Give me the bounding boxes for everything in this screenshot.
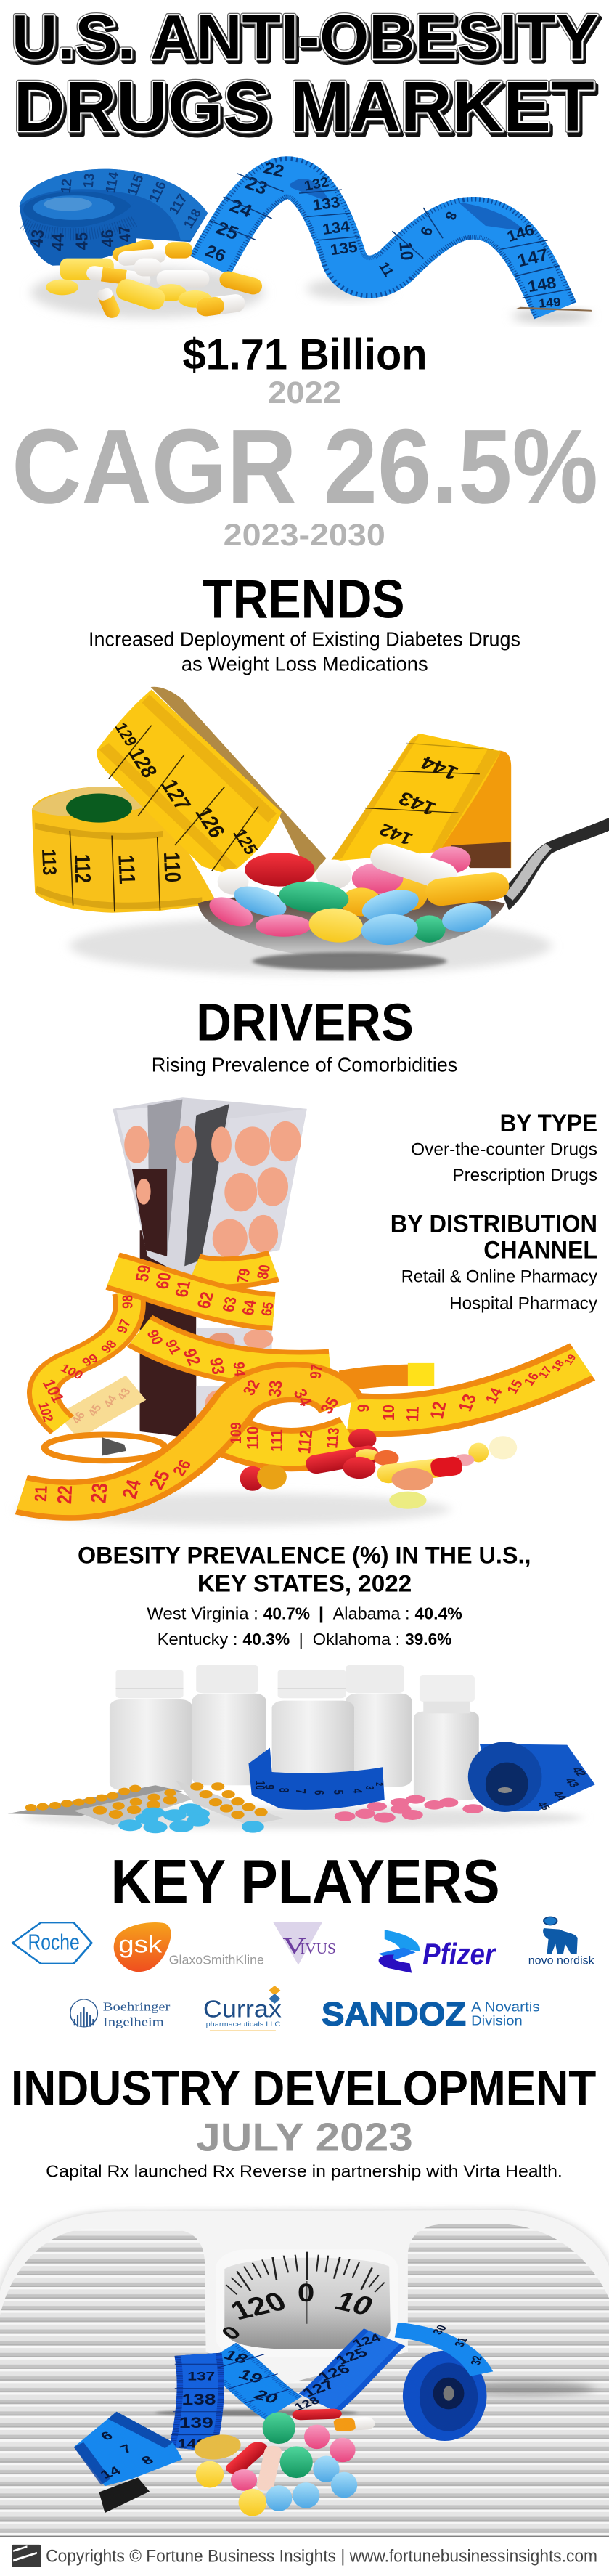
- logo: Sandoz: Division: [471, 2014, 523, 2028]
- image: blue measuring tape with yellow pills: 134: [321, 217, 351, 238]
- image: blister packs wrapped in orange tape: 97: [307, 1364, 326, 1379]
- image: blister packs wrapped in orange tape: 102: [35, 1401, 57, 1423]
- dial: 0: [216, 2323, 246, 2344]
- prevalence values: 40.7%: [263, 1605, 310, 1623]
- tape ribbons: [192, 2330, 482, 2450]
- yellow tape roll: [32, 787, 218, 913]
- image: blister packs wrapped in orange tape: 61: [171, 1279, 195, 1299]
- image: blue measuring tape with yellow pills: 149: [538, 295, 561, 311]
- tape roll: 118: [181, 206, 204, 231]
- image: blue measuring tape with yellow pills: 24: [227, 196, 256, 222]
- image: bathroom scale with tape and pills: 137: [187, 2370, 215, 2384]
- tape roll: 12: [57, 178, 75, 194]
- image: blister packs wrapped in orange tape: 91: [161, 1338, 184, 1357]
- logo: Roche: [12, 1922, 91, 1964]
- image: bathroom scale with tape and pills: 125: [332, 2345, 371, 2368]
- image: blister packs wrapped in orange tape: 17: [536, 1365, 555, 1381]
- yellow tape loop: [97, 687, 326, 878]
- scale plate: [0, 2210, 609, 2536]
- image: blister packs wrapped in orange tape: 99: [79, 1351, 101, 1369]
- image: blue measuring tape with yellow pills: 147: [515, 245, 550, 271]
- image: bathroom scale with tape and pills: 18: [220, 2347, 251, 2367]
- image: blister packs wrapped in orange tape: 79: [234, 1267, 254, 1284]
- image: blue measuring tape with yellow pills: 132: [303, 174, 330, 194]
- image: blister packs wrapped in orange tape: 14: [482, 1386, 506, 1406]
- ribbed surface: [0, 2224, 609, 2536]
- image: bathroom scale with tape and pills: 126: [314, 2362, 353, 2384]
- blue band: 9: [261, 1784, 276, 1789]
- yellow tape loop: 129: [111, 720, 142, 749]
- pills on scale: [188, 2408, 376, 2516]
- image: blister packs wrapped in orange tape: 44: [102, 1394, 120, 1410]
- image: blister packs wrapped in orange tape: 65: [258, 1301, 277, 1317]
- image: blister packs wrapped in orange tape: 109: [227, 1422, 245, 1444]
- image: blister packs wrapped in orange tape: 34: [290, 1386, 316, 1409]
- prevalence values: Kentucky :: [158, 1631, 237, 1649]
- by distribution channel items: [401, 1267, 597, 1313]
- image: blister packs wrapped in orange tape: 94: [229, 1362, 248, 1377]
- logo: GSK: [114, 1922, 264, 1972]
- image: blister packs wrapped in orange tape: 33: [264, 1380, 286, 1398]
- image: blister packs wrapped in orange tape: 24: [118, 1477, 146, 1500]
- prevalence values: |: [298, 1631, 303, 1649]
- logo: Currax: Currax: [203, 1996, 282, 2023]
- blue band: 8: [276, 1788, 291, 1792]
- drivers heading: DRIVERS: [196, 993, 414, 1052]
- logo: Vivus: IVUS: [300, 1940, 336, 1957]
- logo: Vivus: [273, 1922, 336, 1965]
- image: bathroom scale with tape and pills: 8: [139, 2453, 157, 2468]
- tape roll: 45: [72, 232, 91, 250]
- section: key players and development: [11, 1848, 596, 2181]
- forecast period: 2023-2030: [224, 519, 385, 553]
- image: blister packs wrapped in orange tape: 9: [353, 1404, 373, 1412]
- logo: Boehringer Ingelheim: Boehringer: [103, 1999, 171, 2014]
- logo: GSK: GlaxoSmithKline: [169, 1953, 264, 1967]
- market value: $1.71 Billion: [182, 330, 428, 379]
- blue band: 4: [349, 1789, 364, 1794]
- spoon: [198, 818, 609, 970]
- image: blue measuring tape with yellow pills: 135: [329, 237, 359, 259]
- orange tape: [21, 1266, 583, 1500]
- image: blister packs wrapped in orange tape: 11: [402, 1406, 422, 1422]
- prevalence values: [147, 1605, 462, 1649]
- prevalence heading: KEY STATES, 2022: [197, 1570, 412, 1597]
- section: trends and drivers: [32, 569, 609, 1076]
- trends text: Increased Deployment of Existing Diabetes Drugs: [89, 628, 520, 651]
- blue tape roll: 42: [568, 1766, 589, 1779]
- yellow tape roll: 113: [37, 849, 60, 876]
- trends text: as Weight Loss Medications: [181, 653, 428, 675]
- prevalence heading: [78, 1543, 531, 1597]
- blue band: 6: [311, 1790, 326, 1795]
- prevalence values: Alabama :: [333, 1605, 410, 1623]
- pills: [46, 237, 264, 320]
- image: blue measuring tape with yellow pills: 22: [261, 158, 286, 182]
- image: blister packs wrapped in orange tape: 97: [113, 1317, 134, 1335]
- title: [12, 2, 600, 150]
- image: blister packs wrapped in orange tape: 80: [254, 1264, 274, 1280]
- tape roll: [403, 2351, 486, 2441]
- right tape band: 142: [376, 820, 416, 848]
- logo: Roche: Roche: [28, 1930, 80, 1954]
- yellow tape loop: 127: [155, 776, 195, 814]
- dial: 10: [330, 2286, 379, 2321]
- prevalence values: Oklahoma :: [313, 1631, 400, 1649]
- image: bathroom scale with tape and pills: 32: [468, 2355, 486, 2366]
- image: blister packs wrapped in orange tape: 101: [38, 1377, 68, 1405]
- image: bathroom scale with tape and pills: 128: [291, 2394, 322, 2413]
- tape roll: 114: [102, 171, 122, 194]
- blue band: 7: [293, 1789, 308, 1794]
- bottles: [110, 1665, 479, 1800]
- tape roll: 115: [124, 173, 147, 198]
- trends heading: TRENDS: [203, 569, 405, 630]
- blue tape roll: 45: [535, 1800, 553, 1812]
- yellow tape loop: 125: [229, 826, 261, 858]
- drivers text: Rising Prevalence of Comorbidities: [152, 1054, 457, 1076]
- image: blister packs wrapped in orange tape: 18: [549, 1359, 567, 1373]
- tape ribbon: [210, 178, 555, 311]
- tape roll: [20, 169, 208, 266]
- small pills: [240, 1429, 517, 1509]
- image: bathroom scale with tape and pills: 124: [350, 2332, 384, 2350]
- image: blister packs wrapped in orange tape: 21: [30, 1485, 51, 1502]
- image: blister packs wrapped in orange tape: 26: [168, 1457, 195, 1479]
- pills on spoon: [203, 840, 511, 947]
- prevalence values: 39.6%: [405, 1631, 451, 1649]
- image: blister packs wrapped in orange tape: 22: [54, 1485, 77, 1504]
- footer: [0, 2536, 609, 2575]
- image: blister packs wrapped in orange tape: 98: [98, 1337, 120, 1356]
- trends text: [89, 628, 520, 675]
- image: blue measuring tape with yellow pills: 10: [395, 241, 417, 261]
- image: bathroom scale with tape and pills: 138: [181, 2392, 216, 2408]
- image: blister packs wrapped in orange tape: 59: [131, 1264, 155, 1283]
- logo: Boehringer Ingelheim: [70, 1999, 171, 2029]
- image: yellow tape and spoon of pills: [32, 687, 609, 975]
- image: blister packs wrapped in orange tape: 23: [86, 1482, 113, 1504]
- yellow tape roll: 110: [158, 852, 185, 883]
- blister strips: [8, 1781, 284, 1825]
- tape roll: 43: [26, 229, 47, 248]
- image: blister packs wrapped in orange tape: 93: [205, 1357, 229, 1376]
- image: blue measuring tape with yellow pills: 146: [504, 221, 536, 245]
- image: blister packs wrapped in orange tape: 111: [266, 1429, 287, 1452]
- image: blister packs wrapped in orange tape: 19: [562, 1352, 579, 1366]
- blue band: 3: [363, 1786, 376, 1789]
- image: bathroom scale with tape and pills: 139: [179, 2415, 213, 2431]
- dial: 120: [225, 2287, 292, 2325]
- blue band: [248, 1748, 385, 1810]
- image: blister packs wrapped in orange tape: 64: [239, 1299, 260, 1317]
- tape roll: 46: [97, 229, 118, 248]
- image: blister packs wrapped in orange tape: 10: [379, 1405, 398, 1421]
- logo: Currax: pharmaceuticals LLC: [206, 2020, 281, 2028]
- image: blister packs wrapped in orange tape: 112: [293, 1429, 316, 1455]
- image: blue measuring tape with yellow pills: 8: [441, 209, 459, 222]
- image: blister packs wrapped in orange tape: 92: [179, 1346, 205, 1368]
- image: blister packs wrapped in orange tape: 13: [455, 1392, 481, 1414]
- section: obesity prevalence: [8, 1543, 595, 1833]
- image: bathroom scale with tape and pills: 140: [178, 2437, 205, 2451]
- right tape band: [330, 734, 511, 868]
- blue band: 10: [252, 1781, 267, 1790]
- development date: JULY 2023: [196, 2116, 413, 2160]
- logo: Fortune Business Insights: [12, 2545, 41, 2567]
- section: scale image and footer: [0, 2210, 609, 2575]
- image: blister packs wrapped in orange tape: 45: [86, 1402, 105, 1418]
- image: blister packs wrapped in orange tape: 32: [240, 1378, 263, 1398]
- yellow tape roll: 111: [113, 855, 139, 885]
- image: blister packs wrapped in orange tape: 15: [504, 1378, 526, 1396]
- image: blue measuring tape with yellow pills: 133: [311, 193, 341, 214]
- image: bathroom scale with tape and pills: 6: [97, 2429, 116, 2443]
- logo: Sandoz: A Novartis: [471, 2000, 540, 2015]
- tape roll: 116: [145, 179, 169, 204]
- blue band: 5: [330, 1789, 346, 1795]
- blue tape roll: 44: [549, 1789, 570, 1803]
- right tape band: 143: [395, 787, 440, 819]
- image: blue measuring tape with yellow pills: 26: [203, 241, 229, 266]
- image: blister packs wrapped in orange tape: 98: [119, 1295, 136, 1309]
- dial: [216, 2249, 398, 2357]
- tape roll: 44: [47, 232, 68, 251]
- image: blue measuring tape with yellow pills: 148: [526, 273, 557, 296]
- logo: Novo Nordisk: [528, 1917, 594, 1967]
- image: blue measuring tape with yellow pills: 23: [242, 173, 270, 199]
- image: blister packs wrapped in orange tape: 113: [324, 1427, 343, 1449]
- yellow tape loop: 128: [123, 744, 163, 781]
- prevalence values: 40.4%: [414, 1605, 462, 1623]
- pink pills: [335, 1795, 483, 1823]
- yellow tape loop: 126: [189, 804, 229, 842]
- prevalence values: |: [319, 1605, 324, 1623]
- blue pills: [118, 1803, 264, 1833]
- image: blister packs wrapped in orange tape: 12: [427, 1400, 451, 1421]
- by distribution channel heading: [391, 1211, 597, 1264]
- image: bathroom scale with tape and pills: 7: [117, 2442, 136, 2456]
- image: blister packs wrapped in orange tape: 90: [143, 1328, 166, 1347]
- image: blister packs wrapped in orange tape: 100: [58, 1361, 86, 1382]
- section: header: [12, 2, 600, 553]
- image: bathroom scale with tape and pills: 14: [97, 2464, 125, 2482]
- image: bathroom scale with tape and pills: [0, 2210, 609, 2536]
- image: blister packs wrapped in orange tape: [15, 1097, 583, 1525]
- logo: Currax: [203, 1986, 282, 2031]
- pill shadows: [155, 2410, 357, 2416]
- prevalence values: 40.3%: [242, 1631, 290, 1649]
- right tape band: 144: [417, 751, 462, 784]
- blue tape roll: 43: [562, 1776, 582, 1789]
- image: blister packs wrapped in orange tape: 25: [145, 1468, 175, 1492]
- image: blister packs wrapped in orange tape: 110: [242, 1426, 262, 1450]
- image: bathroom scale with tape and pills: 30: [430, 2323, 450, 2336]
- image: white bottles, pills and blue tape: [8, 1665, 595, 1833]
- image: blue measuring tape with yellow pills: [20, 158, 592, 322]
- image: blister packs wrapped in orange tape: 46: [70, 1410, 89, 1426]
- image: blue measuring tape with yellow pills: 11: [376, 259, 397, 279]
- yellow tape roll: 112: [70, 853, 96, 884]
- blue band: 2: [374, 1782, 384, 1786]
- image: blue measuring tape with yellow pills: 25: [213, 219, 241, 244]
- section: segmentation: [15, 1097, 597, 1525]
- image: bathroom scale with tape and pills: 31: [452, 2336, 471, 2348]
- tape roll: 13: [80, 173, 97, 188]
- image: blister packs wrapped in orange tape: 63: [219, 1296, 240, 1313]
- image: bathroom scale with tape and pills: 20: [250, 2387, 282, 2407]
- logo: Boehringer Ingelheim: Ingelheim: [103, 2015, 164, 2029]
- image: blue measuring tape with yellow pills: 9: [417, 224, 436, 237]
- prevalence values: West Virginia :: [147, 1605, 258, 1623]
- image: bathroom scale with tape and pills: 127: [299, 2378, 338, 2400]
- blister packs: [113, 1097, 307, 1439]
- image: blister packs wrapped in orange tape: 16: [520, 1370, 542, 1388]
- logo: Sandoz: SANDOZ: [322, 1996, 466, 2032]
- tape roll: 117: [165, 191, 190, 217]
- logo: Pfizer: [379, 1930, 496, 1973]
- image: blister packs wrapped in orange tape: 62: [192, 1290, 218, 1310]
- dial: 0: [298, 2279, 314, 2307]
- logo: GSK: gsk: [118, 1931, 163, 1958]
- image: bathroom scale with tape and pills: 19: [235, 2367, 266, 2386]
- image: blister packs wrapped in orange tape: 35: [316, 1394, 343, 1416]
- base year: 2022: [268, 376, 341, 410]
- blue tape roll: [468, 1742, 595, 1812]
- logo: Vivus: V: [283, 1933, 306, 1959]
- tape roll: 47: [115, 225, 134, 243]
- logo: Pfizer: Pfizer: [422, 1938, 496, 1971]
- image: blister packs wrapped in orange tape: 43: [115, 1386, 134, 1402]
- image: blister packs wrapped in orange tape: 60: [151, 1271, 175, 1291]
- by type items: [411, 1139, 597, 1185]
